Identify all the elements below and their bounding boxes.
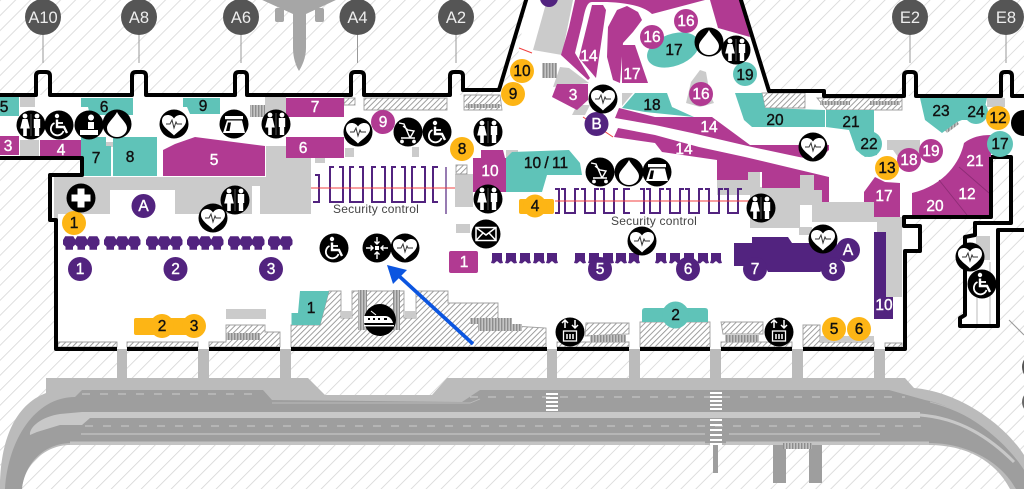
icon: toilets [220,186,250,214]
side corridor and room [960,157,1011,328]
gate A6 [223,0,259,63]
stairs [226,63,959,342]
teal labels: 17 [665,42,683,59]
gate A4 [340,0,376,63]
purple markers: 3 [267,261,275,278]
teal labels: 7 [92,150,100,167]
icon: water drop [694,28,724,56]
purple markers: 2 [171,261,180,278]
icon: heart defibrillator [344,118,372,146]
icon: lounge bench [642,158,672,186]
cut-off gate markers [1009,320,1024,414]
magenta labels: 14 [580,48,598,65]
arrow: blue pointer [387,265,473,344]
icon: meeting point arrows [362,234,392,262]
purple markers: 10 [875,297,893,314]
orange markers: 5 [830,321,838,338]
teal labels: 1 [307,300,315,317]
magenta labels: 17 [623,66,641,83]
icon: water drop [102,110,132,138]
orange markers: 4 [531,198,540,215]
airplane [260,0,338,71]
magenta labels: 3 [4,138,12,155]
gate A8: A8 [129,9,149,27]
icon: heart defibrillator [160,110,188,138]
teal labels: 6 [100,99,108,116]
gate E2 [892,0,928,63]
road system [0,349,1024,489]
security lanes [313,167,742,214]
purple markers [68,0,893,314]
gate A6: A6 [231,9,251,27]
icon: water drop [614,158,644,186]
icon: toilets [474,184,502,214]
orange markers: 9 [509,86,517,103]
gate A2 [438,0,474,63]
orange markers: 13 [878,160,896,177]
gate E2: E2 [900,9,920,27]
icon: heart defibrillator [808,224,838,254]
label: security control left: Security control [333,202,419,216]
magenta labels: 18 [900,152,918,169]
magenta shops [0,0,991,273]
gate A10: A10 [28,9,58,27]
icon: heart defibrillator [956,242,984,272]
orange markers: 1 [70,215,78,232]
gate A2: A2 [446,9,466,27]
terminal floor [0,0,1024,349]
icon: wheelchair [968,270,996,298]
icon: stroller [586,158,614,186]
icon: toilets [722,36,750,64]
magenta labels: 7 [311,99,319,116]
hatched structures [58,93,902,347]
magenta labels: 6 [299,140,307,157]
icon: wheelchair [320,234,348,262]
orange markers: 6 [855,321,863,338]
icon: heart defibrillator [390,234,420,262]
teal labels: 20 [766,112,784,129]
icon: stroller [394,118,422,146]
icon: cut-off right edge [1011,110,1024,136]
magenta labels: 16 [692,86,710,103]
teal shops [0,26,987,325]
magenta labels: 9 [379,114,387,131]
icon: heart defibrillator [198,204,228,232]
purple markers: B [591,116,602,133]
gate A8 [121,0,157,63]
orange markers: 2 [158,318,166,335]
orange markers [62,59,1010,341]
icon: lift [764,318,794,346]
icon: heart defibrillator [588,84,618,114]
orange markers: 12 [989,110,1007,127]
purple markers: 8 [829,261,837,278]
magenta labels: 16 [677,13,695,30]
icon: toilets [746,194,776,222]
teal labels: 8 [126,149,134,166]
icon: toilets [16,110,46,140]
label: security control right: Security control [611,214,697,228]
icon: mail [472,220,500,248]
purple markers: 5 [596,261,604,278]
purple markers: 7 [751,261,759,278]
icon: lift [556,318,584,346]
magenta labels: 16 [643,29,661,46]
orange markers: 8 [458,141,466,158]
magenta labels: 14 [675,141,693,158]
purple markers: A [843,242,854,259]
teal labels: 23 [932,103,950,120]
purple markers: 6 [684,261,692,278]
check-in seats [63,236,722,264]
orange markers: 3 [190,318,198,335]
icon: information [74,110,104,140]
gate E8: E8 [996,9,1016,27]
teal labels: 2 [671,307,680,324]
magenta labels [4,9,984,271]
purple markers: A [138,198,149,215]
icon: train [364,304,396,336]
gate A4: A4 [347,9,368,27]
icon: first aid cross [66,184,96,212]
magenta labels: 17 [875,188,893,205]
magenta labels: 21 [966,153,984,170]
icon: wheelchair [44,110,74,140]
magenta labels: 19 [922,143,940,160]
icon: toilets [474,118,502,146]
magenta labels: 3 [569,87,577,104]
orange markers: 10 [513,63,531,80]
magenta labels: 4 [57,142,66,159]
magenta labels: 14 [700,119,718,136]
teal labels: 19 [736,67,754,84]
teal labels: 22 [860,136,878,153]
gate A10 [25,0,61,63]
teal labels: 24 [967,104,985,121]
icon: wheelchair [422,118,452,146]
teal labels [0,42,1013,328]
magenta labels: 12 [958,186,976,203]
icon: lounge bench [220,110,248,138]
teal labels: 9 [199,98,207,115]
purple gates [734,232,893,319]
purple markers: 1 [76,261,84,278]
grey service areas [20,0,1005,319]
magenta labels: 1 [460,254,468,271]
magenta labels: 10 [481,163,499,180]
teal labels: 18 [643,97,661,114]
gate E8 [988,0,1024,63]
teal labels: 10 / 11 [524,155,568,172]
icon: toilets [262,110,290,138]
icon: heart defibrillator [798,132,828,162]
teal labels: 17 [991,136,1009,153]
walls [0,0,1024,349]
magenta labels: 20 [926,198,944,215]
teal labels: 21 [842,114,860,131]
magenta labels: 5 [210,152,218,169]
icon: heart defibrillator [628,226,656,256]
